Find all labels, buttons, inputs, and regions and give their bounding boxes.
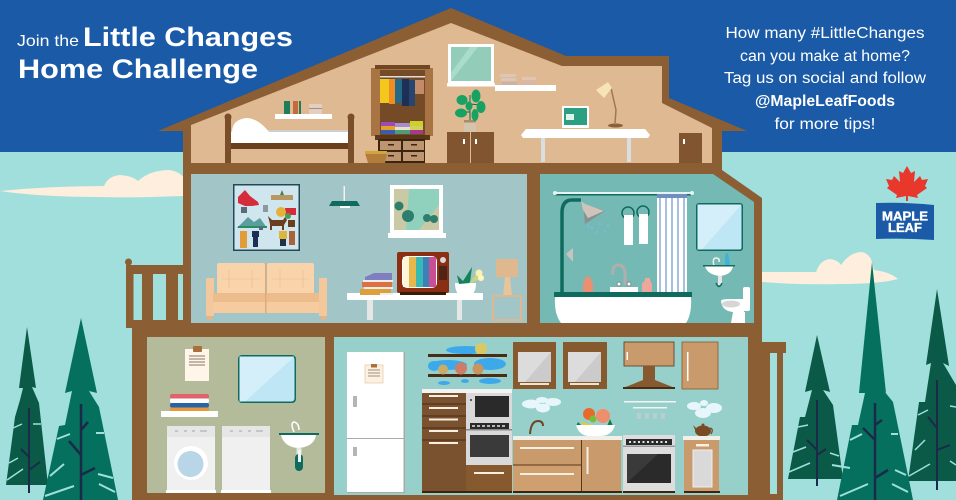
upper cabinets with glass bbox=[513, 342, 607, 389]
logo: Maple Leaf bbox=[876, 166, 934, 240]
left balcony knob bbox=[125, 258, 132, 266]
microwave bbox=[466, 393, 512, 420]
logo: Maple Leaf: MAPLE bbox=[882, 210, 928, 224]
bubbles right bbox=[687, 400, 722, 418]
retro TV bbox=[397, 252, 449, 295]
heading: challenge title bbox=[17, 22, 293, 84]
dryer bbox=[221, 426, 271, 493]
tree: far right dark bbox=[908, 289, 956, 490]
text block: social call to action: @MapleLeafFoods bbox=[755, 93, 895, 110]
tall cabinet with drawers bbox=[422, 389, 512, 493]
base cabinet right bbox=[683, 436, 720, 493]
toilet bbox=[721, 287, 750, 323]
attic window bbox=[447, 44, 495, 86]
panel: kitchen bbox=[334, 337, 748, 495]
fruit bowl bbox=[576, 408, 615, 436]
clothes bbox=[380, 79, 424, 106]
counter and lower cabinets bbox=[513, 436, 622, 493]
text block: social call to action: for more tips! bbox=[774, 116, 876, 133]
text block: social call to action: How many #LittleChanges bbox=[726, 25, 925, 42]
bathtub bbox=[554, 292, 692, 323]
upper right cabinet bbox=[682, 342, 718, 389]
shelf with books bbox=[275, 101, 332, 119]
tub fittings bbox=[583, 265, 652, 292]
bubbles left bbox=[522, 397, 561, 412]
panel: living room bbox=[191, 174, 527, 323]
text block: social call to action: Tag us on social and follow bbox=[724, 70, 927, 87]
towels bbox=[622, 206, 649, 245]
potted plant bbox=[455, 90, 486, 132]
bathroom sink bbox=[703, 253, 735, 286]
small cabinet bbox=[679, 133, 702, 163]
text block: social call to action bbox=[724, 25, 927, 133]
range hood bbox=[623, 342, 675, 389]
sofa bbox=[206, 263, 327, 320]
laundry mirror bbox=[238, 355, 296, 403]
book stack bbox=[360, 273, 393, 295]
desk lamp bbox=[596, 82, 623, 128]
poster: Canada map bbox=[233, 184, 300, 251]
heading: challenge title: Home Challenge bbox=[18, 54, 258, 84]
clipboard bbox=[185, 346, 209, 381]
washing machine bbox=[166, 426, 216, 493]
attic cabinet bbox=[447, 132, 494, 163]
attic shelf with stacks bbox=[495, 74, 556, 91]
panel: laundry room bbox=[147, 337, 325, 493]
table lamp and side table bbox=[493, 259, 521, 320]
logo: Maple Leaf: LEAF bbox=[888, 221, 922, 235]
folded clothes bbox=[381, 121, 423, 134]
teapot bbox=[693, 424, 712, 436]
wall valve bbox=[566, 248, 573, 262]
laundry sink bbox=[279, 422, 319, 467]
bathroom mirror bbox=[696, 203, 743, 251]
desk bbox=[521, 129, 650, 162]
shower curtain bbox=[657, 194, 687, 293]
TV table bbox=[347, 293, 483, 320]
bed bbox=[224, 114, 354, 163]
cloud: right bbox=[762, 252, 898, 284]
table plant bbox=[455, 267, 484, 296]
right porch slit bbox=[770, 353, 777, 494]
house structure bbox=[125, 8, 786, 500]
shower rod bbox=[553, 191, 694, 196]
built-in oven bbox=[466, 420, 512, 465]
fridge note bbox=[365, 364, 383, 383]
tree: left tall bbox=[43, 318, 118, 500]
heading: challenge title: Little Changes bbox=[83, 22, 293, 52]
drawers bbox=[375, 135, 430, 163]
cloud: left bbox=[0, 170, 184, 197]
open shelves with blue splash bbox=[428, 343, 507, 385]
shower pipe and head bbox=[562, 200, 610, 293]
tree: far left dark bbox=[6, 327, 48, 493]
living room window bbox=[388, 185, 446, 238]
tree: right tall bbox=[832, 262, 913, 500]
utensil rack bbox=[624, 401, 676, 419]
heading: challenge title: Join the bbox=[17, 33, 79, 50]
laundry basket bbox=[365, 151, 387, 163]
lower drawer bbox=[466, 465, 512, 493]
fridge bbox=[347, 352, 405, 493]
stove bbox=[623, 435, 675, 493]
panel: attic bedroom bbox=[191, 23, 712, 163]
pendant lamp bbox=[329, 186, 360, 208]
left balcony gaps bbox=[134, 274, 183, 320]
tree: right small bbox=[788, 335, 843, 486]
folded towels bbox=[161, 394, 218, 417]
panel: bathroom bbox=[540, 174, 754, 323]
wardrobe bbox=[371, 65, 433, 163]
laptop bbox=[562, 106, 589, 128]
sink faucet bbox=[530, 421, 543, 434]
text block: social call to action: can you make at home? bbox=[740, 48, 910, 65]
